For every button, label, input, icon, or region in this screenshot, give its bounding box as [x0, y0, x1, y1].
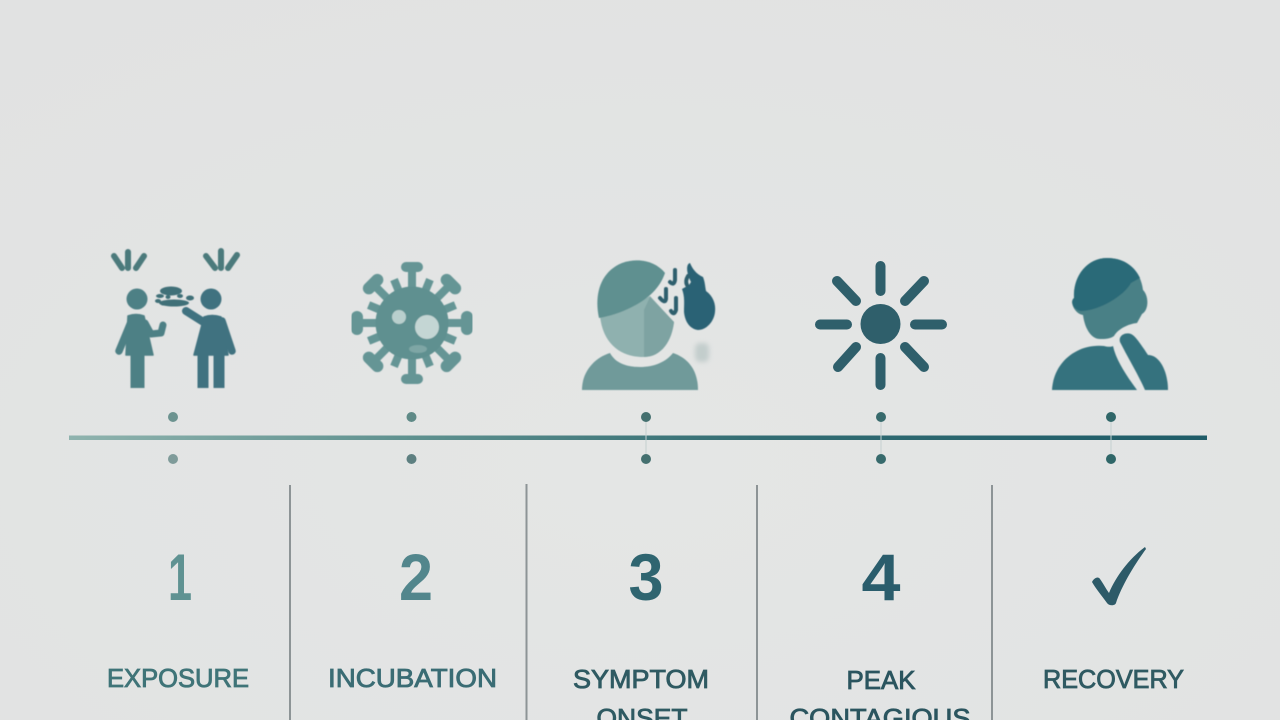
step 4: peak contagious: 4 [862, 540, 901, 614]
step 2: incubation: INCUBATION [328, 663, 497, 693]
icon: recovery, person touching chin [1052, 258, 1168, 390]
step 2: incubation: 2 [399, 540, 433, 614]
column dividers [290, 484, 992, 720]
step 5: recovery [1043, 547, 1184, 694]
timeline axis [69, 436, 1207, 440]
icon: incubation, virus particle [357, 267, 467, 379]
icon: peak contagious, radiating sun [820, 266, 942, 385]
step 1: exposure [107, 540, 249, 693]
step 4: peak contagious: PEAK [846, 665, 916, 695]
step 1: exposure: 1 [168, 540, 192, 614]
icon: exposure, two people sharing droplets [114, 251, 237, 388]
step 1: exposure: EXPOSURE [107, 663, 249, 693]
step 3: symptom onset: 3 [628, 540, 664, 614]
icon: symptom onset, person with fever flame [582, 260, 715, 390]
step 3: symptom onset [573, 540, 709, 720]
step 4: peak contagious [790, 540, 970, 720]
step 3: symptom onset: SYMPTOM [573, 664, 709, 694]
timeline node markers [168, 412, 1116, 464]
step 5: recovery: RECOVERY [1043, 664, 1184, 694]
step 2: incubation [328, 540, 497, 693]
